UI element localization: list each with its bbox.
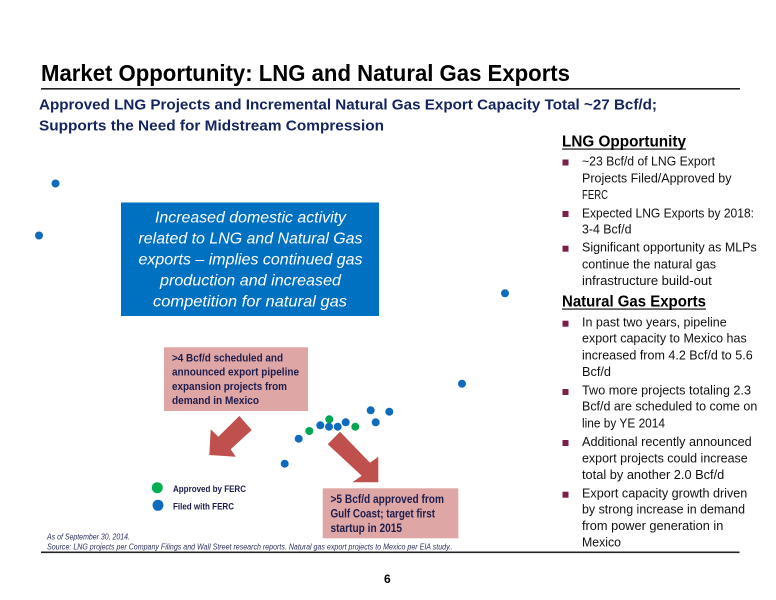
- Natural Gas Exports bullets: line by YE 2014: [582, 416, 665, 430]
- page number: 6: [384, 572, 391, 586]
- Natural Gas Exports bullets: export projects could increase: [582, 451, 748, 465]
- Natural Gas Exports bullets: Bcf/d are scheduled to come on: [582, 400, 757, 414]
- LNG Opportunity bullets: continue the natural gas: [582, 257, 716, 271]
- Natural Gas Exports bullets: [562, 316, 757, 550]
- callout: domestic activity: exports – implies continued gas: [138, 252, 363, 269]
- Natural Gas Exports bullets: export capacity to Mexico has: [582, 332, 747, 346]
- footnote: Source: LNG projects per Company Filings and Wall Street research reports. Natural gas export projects to Mexico per EIA study..: [47, 542, 453, 552]
- callout: domestic activity: competition for natural gas: [153, 294, 347, 311]
- subtitle: [39, 96, 657, 134]
- callout: domestic activity: [121, 202, 379, 316]
- LNG Opportunity bullets: Significant opportunity as MLPs: [582, 241, 757, 255]
- Natural Gas Exports bullets: Bcf/d: [582, 365, 611, 379]
- Natural Gas Exports bullets: In past two years, pipeline: [582, 316, 727, 330]
- Natural Gas Exports bullets: Additional recently announced: [582, 435, 752, 449]
- Natural Gas Exports bullets: total by another 2.0 Bcf/d: [582, 468, 724, 482]
- subtitle: Approved LNG Projects and Incremental Natural Gas Export Capacity Total ~27 Bcf/d;: [39, 96, 657, 114]
- LNG Opportunity bullets: FERC: [582, 188, 608, 202]
- project location dots: [35, 180, 509, 468]
- callout: Mexico pipeline expansion: demand in Mexico: [172, 395, 259, 407]
- legend: Filed with FERC: [173, 502, 234, 512]
- callout: Gulf Coast: Gulf Coast; target first: [330, 508, 435, 520]
- arrow: toward Mexico: [209, 416, 252, 457]
- Natural Gas Exports bullets: increased from 4.2 Bcf/d to 5.6: [582, 348, 753, 362]
- legend: Approved by FERC: [173, 484, 246, 495]
- LNG Opportunity bullets: Projects Filed/Approved by: [582, 171, 732, 185]
- Natural Gas Exports bullets: Two more projects totaling 2.3: [582, 383, 751, 397]
- LNG Opportunity bullets: 3-4 Bcf/d: [582, 222, 632, 236]
- callout: domestic activity: Increased domestic activity: [155, 210, 347, 226]
- callout: domestic activity: production and increased: [159, 273, 342, 290]
- callout: Gulf Coast: [323, 488, 458, 538]
- heading: Natural Gas Exports: Natural Gas Exports: [562, 294, 706, 311]
- callout: Mexico pipeline expansion: expansion projects from: [172, 381, 287, 393]
- heading: LNG Opportunity: LNG Opportunity: [562, 134, 686, 151]
- LNG Opportunity bullets: [562, 155, 757, 288]
- Natural Gas Exports bullets: by strong increase in demand: [582, 503, 745, 517]
- Natural Gas Exports bullets: from power generation in: [582, 519, 723, 533]
- callout: Gulf Coast: startup in 2015: [330, 522, 402, 535]
- title: Market Opportunity: LNG and Natural Gas Exports: [41, 60, 570, 86]
- callout: Mexico pipeline expansion: [164, 347, 308, 411]
- legend: [152, 482, 246, 512]
- subtitle: Supports the Need for Midstream Compression: [39, 118, 384, 134]
- callout: Gulf Coast: >5 Bcf/d approved from: [330, 493, 444, 506]
- footnote: [46, 532, 453, 552]
- callout: Mexico pipeline expansion: >4 Bcf/d scheduled and: [172, 353, 283, 365]
- arrow: toward Gulf Coast: [328, 432, 378, 482]
- Natural Gas Exports bullets: Mexico: [582, 536, 621, 550]
- LNG Opportunity bullets: ~23 Bcf/d of LNG Export: [582, 155, 715, 169]
- callout: domestic activity: related to LNG and Natural Gas: [138, 230, 363, 248]
- callout: Mexico pipeline expansion: announced export pipeline: [172, 367, 299, 379]
- Natural Gas Exports bullets: Export capacity growth driven: [582, 486, 747, 500]
- footnote: As of September 30, 2014.: [46, 532, 130, 542]
- LNG Opportunity bullets: infrastructure build-out: [582, 274, 712, 288]
- LNG Opportunity bullets: Expected LNG Exports by 2018:: [582, 206, 754, 220]
